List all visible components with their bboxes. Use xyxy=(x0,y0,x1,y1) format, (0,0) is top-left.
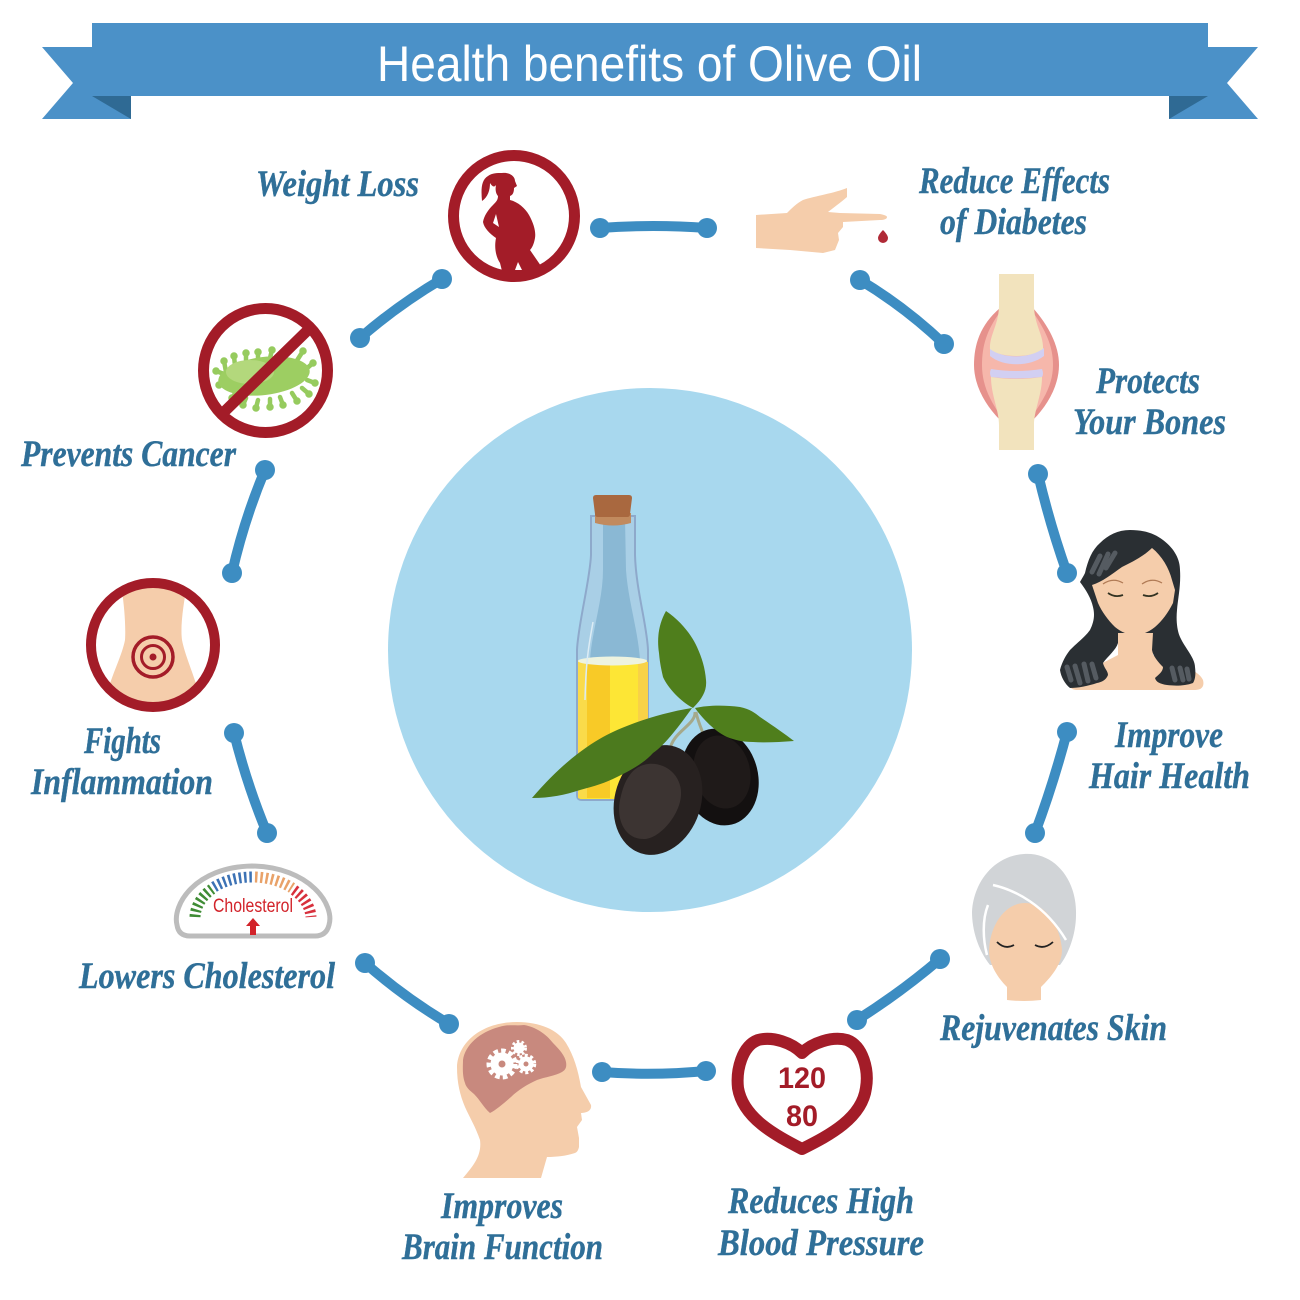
banner right fold xyxy=(1169,96,1208,119)
icon: fights inflammation belly target xyxy=(91,580,215,712)
connector: cancer to weight loss xyxy=(350,269,452,348)
cork xyxy=(595,513,631,526)
illustration: olives and leaves xyxy=(532,611,794,867)
label: improves brain function: Improves xyxy=(440,1186,563,1227)
icon: finger with blood drop xyxy=(756,188,888,253)
stems xyxy=(670,712,704,750)
label: fights inflammation: Inflammation xyxy=(30,762,213,803)
icon: bone joint xyxy=(974,274,1059,450)
title banner xyxy=(42,23,1258,119)
label: reduces high blood pressure: Reduces High xyxy=(727,1181,914,1222)
icon: cholesterol gauge xyxy=(176,866,330,936)
label: protects your bones xyxy=(1073,361,1226,443)
banner main band xyxy=(92,23,1208,96)
icon: brain in head xyxy=(457,1022,591,1178)
label: improves brain function: Brain Function xyxy=(401,1227,603,1268)
label: improve hair health: Improve xyxy=(1114,715,1223,756)
connector: brain to cholesterol xyxy=(355,953,459,1034)
icon: blood pressure heart xyxy=(738,1039,867,1149)
prohibition slash xyxy=(223,328,310,413)
icon: prevents cancer crossed germ xyxy=(204,308,328,432)
central blue circle xyxy=(388,388,912,912)
label: reduce effects of diabetes xyxy=(918,161,1110,243)
label: reduce effects of diabetes: Reduce Effects xyxy=(918,161,1110,202)
label: reduce effects of diabetes: of Diabetes xyxy=(940,202,1087,243)
banner left tail xyxy=(42,47,131,119)
connector: inflammation to cancer xyxy=(222,460,275,583)
banner right tail xyxy=(1169,47,1258,119)
icon: blood pressure heart: 120 xyxy=(778,1062,826,1095)
label: improve hair health xyxy=(1088,715,1250,797)
connector: hair to skin xyxy=(1025,722,1077,843)
label: lowers cholesterol: Lowers Cholesterol xyxy=(78,956,336,997)
label: reduces high blood pressure xyxy=(717,1181,924,1264)
back olive xyxy=(671,720,769,834)
title: Health benefits of Olive Oil xyxy=(377,36,922,92)
label: weight loss: Weight Loss xyxy=(256,164,419,205)
label: fights inflammation xyxy=(30,721,213,803)
label: prevents cancer: Prevents Cancer xyxy=(20,434,237,475)
label: reduces high blood pressure: Blood Pressure xyxy=(717,1223,924,1264)
icon: cholesterol gauge: Cholesterol xyxy=(213,896,293,917)
icon: gray haired face xyxy=(972,854,1076,1001)
icon: blood pressure heart: 80 xyxy=(786,1100,818,1133)
label: improves brain function xyxy=(401,1186,603,1268)
icon: weight loss silhouette in circle xyxy=(454,156,574,276)
banner left fold xyxy=(92,96,131,119)
label: protects your bones: Your Bones xyxy=(1073,402,1226,443)
connector: skin to blood pressure xyxy=(847,949,950,1030)
front olive xyxy=(600,733,716,867)
illustration: olive oil bottle xyxy=(577,495,648,800)
label: improve hair health: Hair Health xyxy=(1088,756,1250,797)
germ xyxy=(216,350,315,408)
connector: blood pressure to brain xyxy=(592,1061,716,1082)
connector: weight loss to diabetes xyxy=(590,218,717,238)
connector: diabetes to bones xyxy=(850,270,954,354)
label: protects your bones: Protects xyxy=(1095,361,1200,402)
label: rejuvenates skin: Rejuvenates Skin xyxy=(939,1008,1167,1049)
connector: cholesterol to inflammation xyxy=(224,723,277,843)
blood drop xyxy=(878,230,888,243)
icon: woman with long dark hair xyxy=(1060,530,1203,690)
gears xyxy=(489,1042,534,1077)
connector: bones to hair xyxy=(1028,464,1077,583)
leaves xyxy=(532,708,692,798)
label: fights inflammation: Fights xyxy=(83,721,161,762)
